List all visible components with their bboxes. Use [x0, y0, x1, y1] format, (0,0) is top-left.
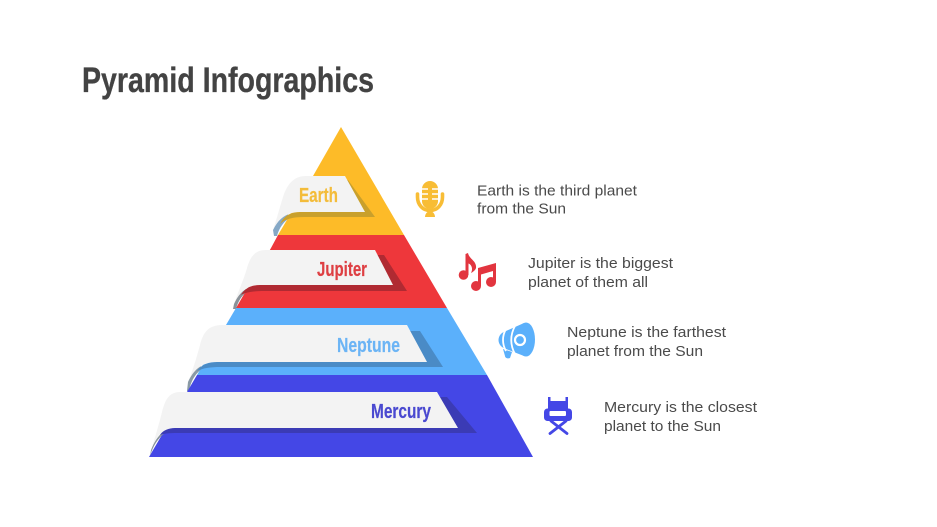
text: Earth: Earth is the third planet [477, 182, 638, 200]
icon: megaphone [498, 322, 535, 358]
text: Earth: from the Sun [477, 200, 566, 218]
text: Jupiter [528, 255, 674, 291]
text: Jupiter: Jupiter is the biggest [528, 255, 674, 272]
title: Pyramid Infographics [82, 61, 374, 100]
icon: microphone [418, 181, 442, 217]
text: Mercury: planet to the Sun [604, 418, 721, 435]
text: Jupiter: planet of them all [528, 274, 648, 291]
text: Earth [477, 182, 638, 218]
text: Mercury: Mercury is the closest [604, 399, 758, 416]
text: Mercury [604, 399, 758, 435]
text: Neptune [567, 324, 727, 360]
tier: Neptune: Neptune [337, 335, 400, 357]
tier: Mercury: Mercury [371, 401, 432, 423]
icon: music notes [459, 253, 496, 291]
icon: director chair [544, 397, 572, 434]
text: Neptune: planet from the Sun [567, 343, 703, 360]
tier: Neptune [187, 308, 487, 391]
text: Neptune: Neptune is the farthest [567, 324, 727, 341]
tier: Jupiter: Jupiter [317, 259, 367, 281]
tier: Earth [273, 127, 404, 236]
tier: Mercury [149, 375, 533, 457]
tier: Jupiter [233, 235, 447, 309]
pyramid chart [149, 127, 533, 457]
tier: Earth: Earth [299, 185, 338, 207]
